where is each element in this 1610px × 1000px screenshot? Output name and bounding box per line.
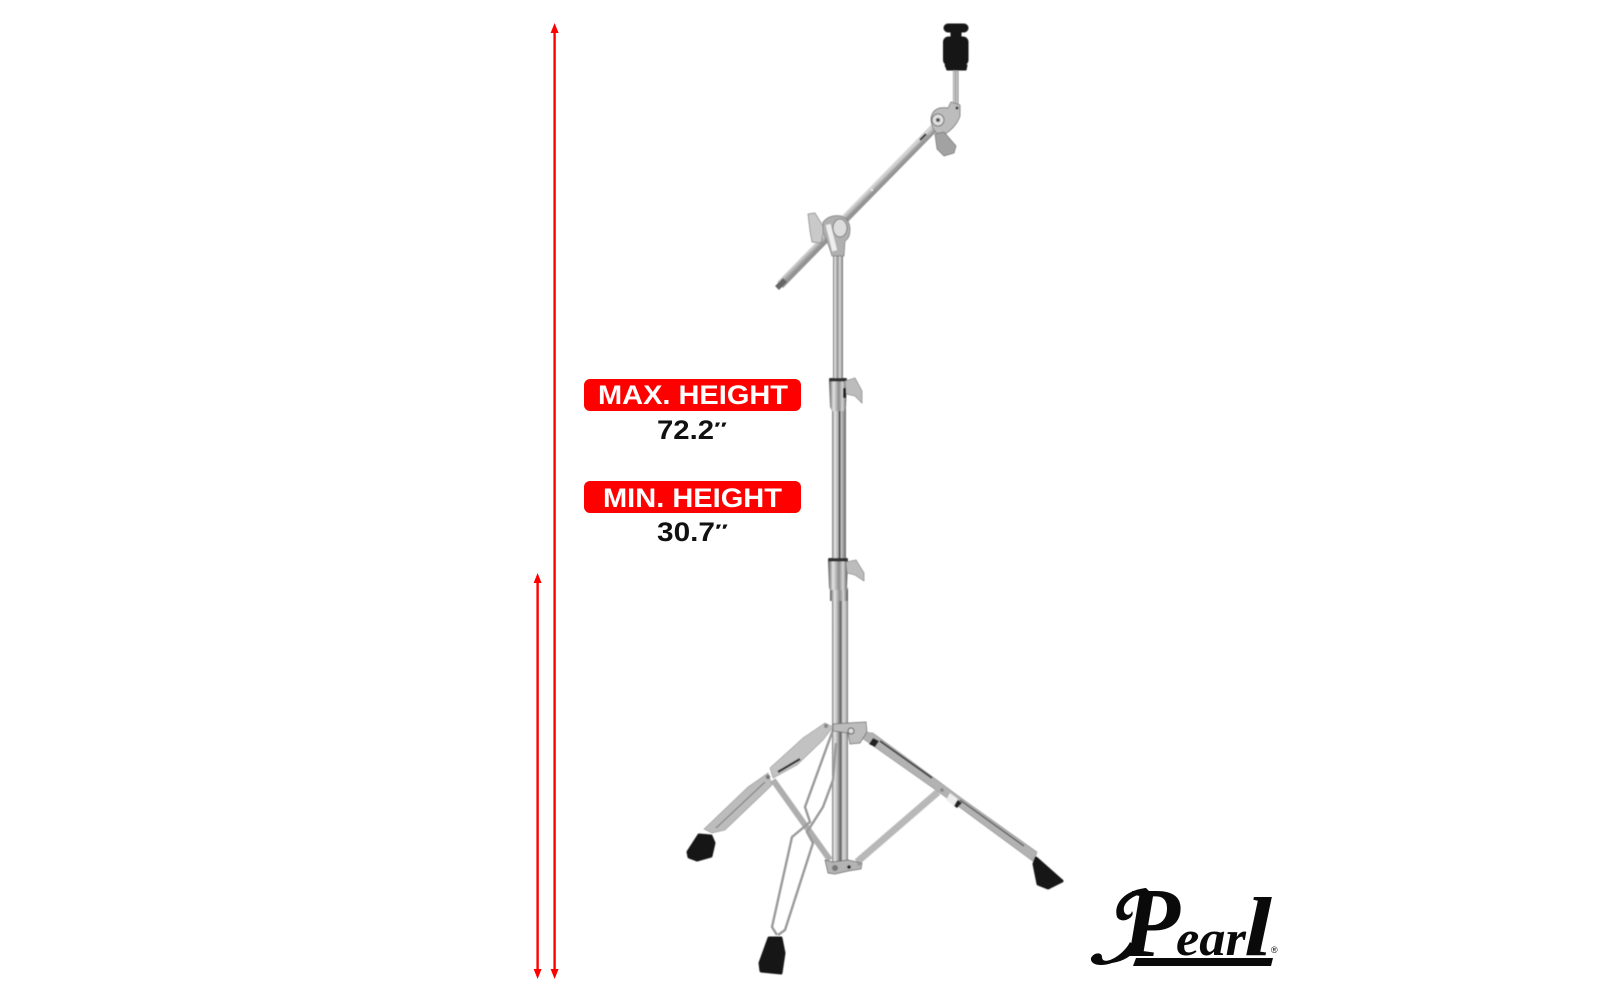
right strut — [857, 792, 938, 862]
Pearl logo: ear — [1176, 910, 1247, 966]
upper leg bracket — [824, 722, 867, 744]
left leg — [704, 723, 833, 833]
value: max height: ″ — [714, 419, 727, 438]
middle mast tube — [832, 408, 846, 560]
value: min height: ″ — [715, 521, 728, 540]
tilter clamp — [931, 102, 960, 156]
boom arm — [777, 128, 934, 288]
dimension arrow: min height — [534, 573, 542, 979]
lower leg bracket — [825, 860, 862, 874]
upper height collar — [829, 378, 862, 411]
rubber foot: left — [688, 835, 714, 860]
cymbal felt and wing nut — [944, 24, 968, 70]
Pearl logo: l — [1244, 881, 1273, 974]
cymbal boom stand photo illustration — [688, 24, 1062, 973]
left strut — [773, 780, 830, 860]
lower mast tube — [832, 588, 848, 863]
value: min height: 30.7 — [657, 517, 715, 547]
upper mast tube — [833, 250, 843, 380]
boom clamp and wing nut — [808, 213, 850, 256]
centre leg rods — [772, 730, 836, 935]
right leg — [862, 732, 1037, 862]
rubber foot: centre — [760, 938, 784, 973]
Pearl logo: P — [1121, 867, 1181, 978]
Pearl logo: ® — [1271, 945, 1278, 955]
label: min height: MIN. HEIGHT — [603, 483, 783, 513]
lower height collar — [828, 558, 864, 601]
label: max height: MAX. HEIGHT — [598, 380, 789, 410]
dimension arrow: max height — [551, 23, 559, 979]
value: max height: 72.2 — [657, 415, 714, 445]
Pearl logo — [1091, 867, 1278, 978]
cymbal rod — [953, 70, 958, 106]
rubber foot: right — [1034, 858, 1062, 888]
